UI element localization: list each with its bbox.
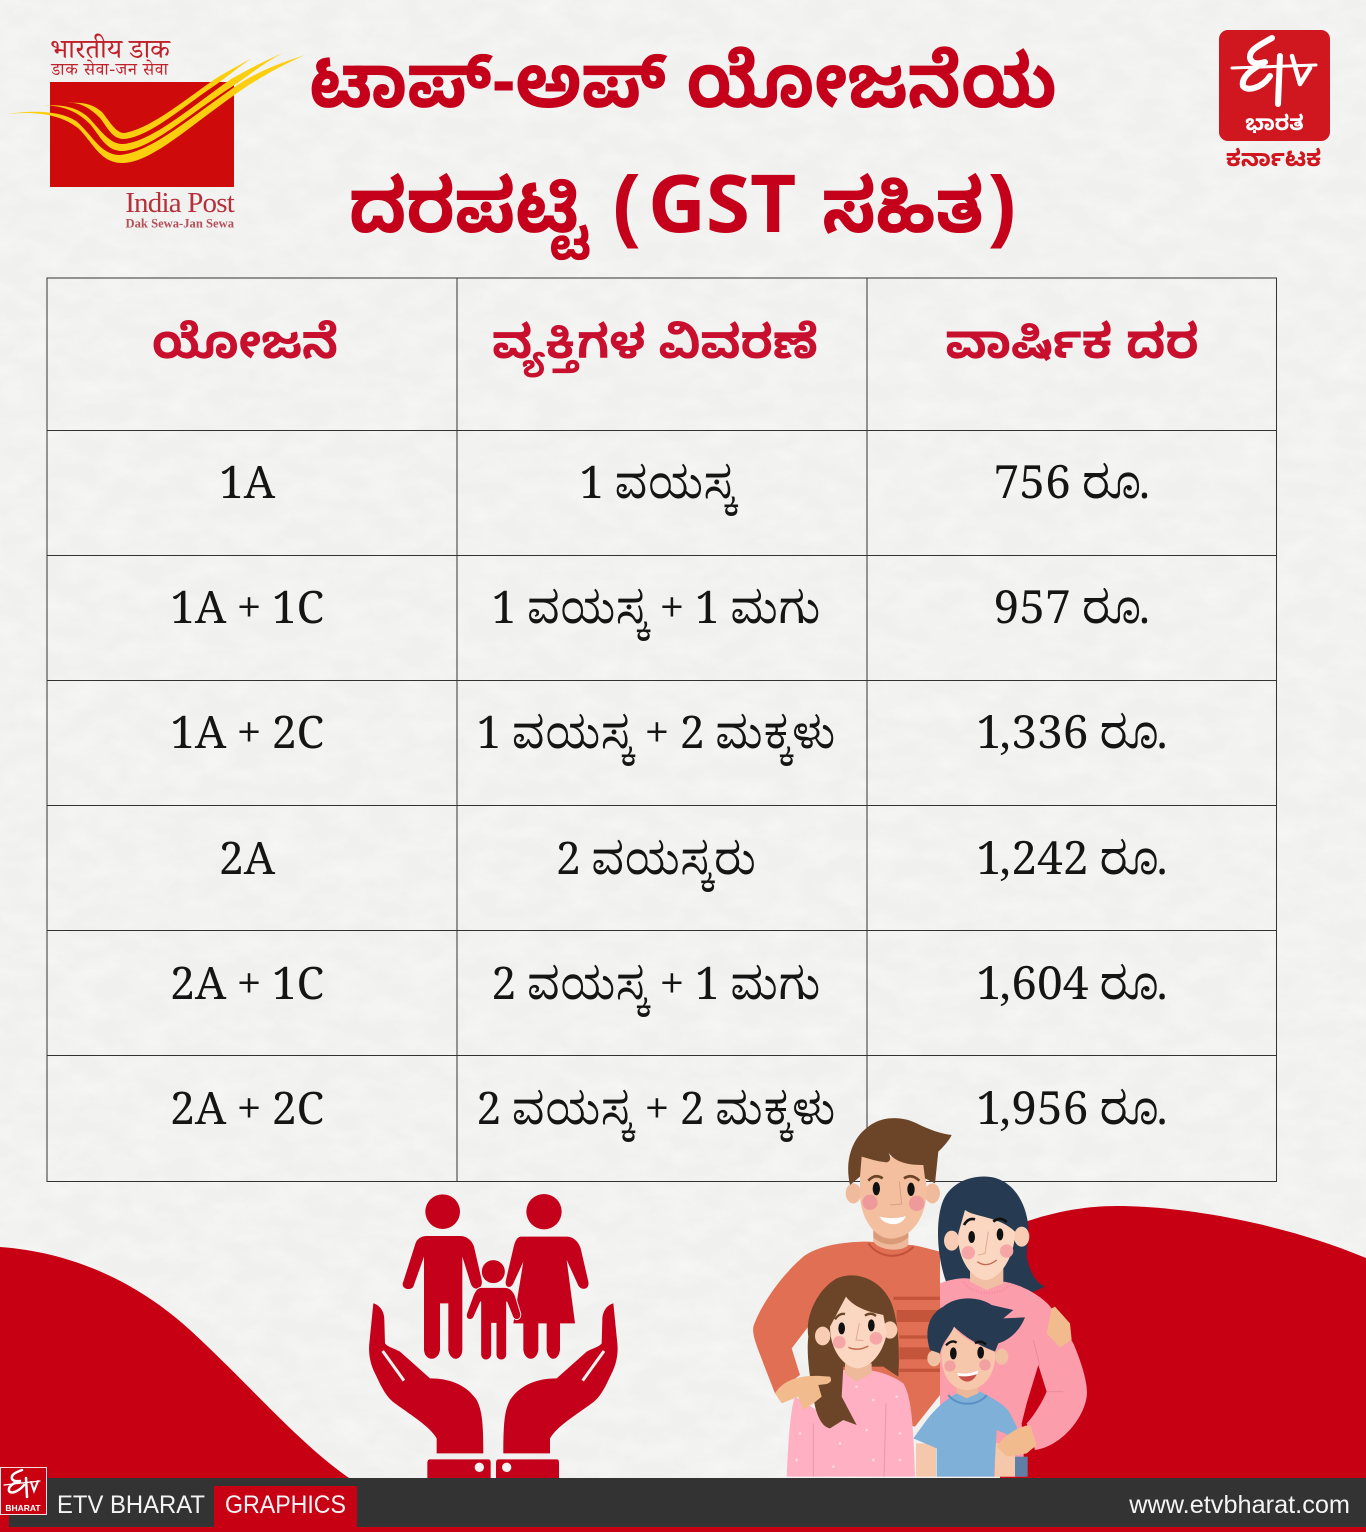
table header [152,319,1199,384]
father [753,1118,952,1427]
son [913,1298,1037,1477]
row 4: 2A [219,834,276,906]
row 6: 2A + 2C [170,1084,324,1156]
logo envelope [50,82,234,187]
row 4: 1,242 ರೂ. [976,832,1168,907]
row 2 [170,581,1150,656]
row 6 [170,1082,1168,1157]
footer graphics text: GRAPHICS [225,1491,346,1519]
title line 2: ( [612,160,639,249]
row 5: 2 ವಯಸ್ಕ + 1 ಮಗು [491,959,821,1031]
title line 1: ಟಾಪ್-ಅಪ್ ಯೋಜನೆಯ [309,46,1057,147]
row 3: 1 ವಯಸ್ಕ + 2 ಮಕ್ಕಳು [476,708,836,780]
row 3: 1A + 2C [170,708,324,780]
footer logo [0,1468,46,1514]
row 3 [170,706,1168,781]
logo Hindi text: भारतीय डाक [50,33,171,76]
left hand [369,1303,483,1453]
footer logo: BHARAT [5,1503,41,1513]
mother [938,1177,1087,1477]
right hand [503,1303,618,1453]
table header: ವ್ಯಕ್ತಿಗಳ ವಿವರಣೆ [492,320,818,384]
row 1: 1A [219,458,276,530]
row 2: 1 ವಯಸ್ಕ + 1 ಮಗು [491,583,821,655]
logo Hindi text: डाक सेवा-जन सेवा [50,59,169,86]
row 1: 1 ವಯಸ್ಕ [579,458,739,530]
footer graphics box [214,1486,357,1527]
title line 2: ) [990,160,1017,249]
logo badge text: ಭಾರತ [1245,113,1304,142]
footer red strip [0,1478,1366,1532]
row 1: 756 ರೂ. [994,456,1150,531]
icon: family in caring hands [369,1194,618,1480]
footer brand text: ETV BHARAT [57,1491,205,1519]
daughter [775,1275,915,1477]
logo Karnataka text: ಕರ್ನಾಟಕ [1226,147,1321,179]
row 2: 957 ರೂ. [994,581,1150,656]
title [309,46,1057,276]
table grid [47,278,1277,1182]
right cuff [496,1459,559,1480]
row 4 [219,832,1168,907]
row 2: 1A + 1C [170,583,324,655]
illustration: family [753,1118,1087,1477]
table [47,278,1277,1182]
logo yellow swoosh [7,53,305,163]
row 6: 2 ವಯಸ್ಕ + 2 ಮಕ್ಕಳು [476,1084,836,1156]
row 1 [219,456,1150,531]
red curve: bottom right [1000,1206,1366,1480]
logo: India Post [7,33,305,230]
table header: ಯೋಜನೆ [152,319,338,384]
child [466,1260,521,1360]
man [403,1194,482,1359]
row 5: 1,604 ರೂ. [976,957,1168,1032]
footer dark bar [9,1478,1366,1527]
logo: India Post: Dak Sewa-Jan Sewa [126,216,235,230]
left cuff [427,1459,491,1480]
row 5: 2A + 1C [170,959,324,1031]
logo ETV mark [1232,38,1316,104]
title line 2: ಸಹಿತ [822,172,984,273]
title line 2: ದರಪಟ್ಟಿ [349,172,590,273]
row 6: 1,956 ರೂ. [976,1082,1168,1157]
logo English text: India Post [125,187,235,219]
woman [506,1194,589,1359]
footer url: www.etvbharat.com [1128,1491,1350,1519]
footer bar [0,1468,1366,1532]
table header: ವಾರ್ಷಿಕ ದರ [945,319,1199,384]
row 3: 1,336 ರೂ. [976,706,1168,781]
row 5 [170,957,1168,1032]
title line 2 [349,160,1017,276]
logo: ETV Bharat Karnataka [1219,30,1330,179]
logo red badge [1219,30,1330,141]
red curve: bottom left [0,1247,352,1480]
title line 2: GST [648,168,796,276]
row 4: 2 ವಯಸ್ಕರು [556,834,756,906]
